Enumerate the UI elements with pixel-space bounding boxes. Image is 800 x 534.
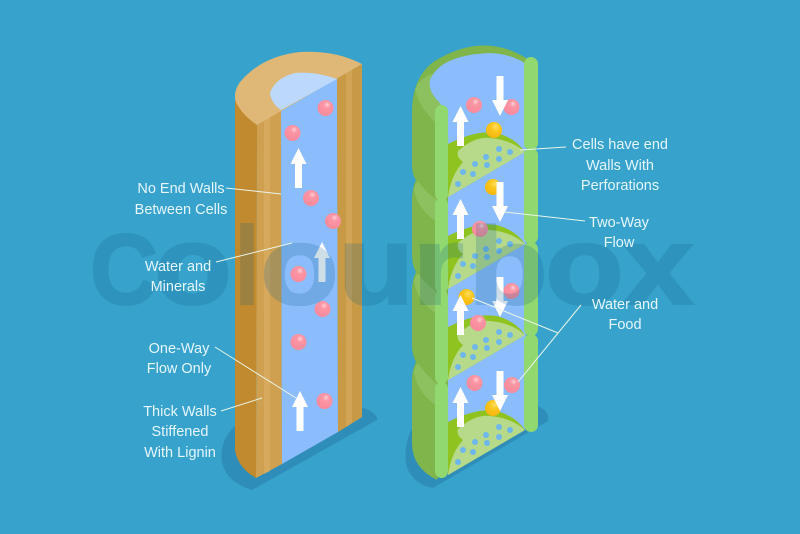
watermark: o xyxy=(545,203,624,328)
xylem top cap xyxy=(235,52,362,125)
label: one-way flow: One-Way xyxy=(149,341,209,357)
watermark xyxy=(90,203,694,328)
watermark: o xyxy=(260,203,339,328)
watermark: b xyxy=(468,205,548,328)
watermark: l xyxy=(235,205,259,328)
watermark: o xyxy=(154,203,232,328)
xylem water channel xyxy=(281,78,338,464)
leader lines xyxy=(215,147,585,411)
shadow: phloem xyxy=(406,406,548,488)
watermark: u xyxy=(338,203,414,328)
phloem arrows xyxy=(452,76,508,427)
label: no end walls: No End Walls xyxy=(137,181,225,197)
phloem channel xyxy=(430,53,526,473)
label: no end walls: Between Cells xyxy=(135,202,227,218)
label: water and minerals: Water and xyxy=(145,259,211,275)
phloem rim highlight xyxy=(415,73,445,122)
label: two-way flow: Flow xyxy=(604,235,635,251)
xylem left side wall xyxy=(235,100,257,478)
phloem right wall strips xyxy=(524,57,538,432)
watermark: x xyxy=(622,203,694,328)
xylem arrows xyxy=(290,148,330,431)
shadow: xylem xyxy=(222,408,377,490)
label: thick walls: Thick Walls xyxy=(143,404,217,420)
watermark: r xyxy=(412,203,464,328)
panel: xylem column xyxy=(222,52,377,490)
xylem top opening xyxy=(270,73,337,110)
label: water and food: Water and xyxy=(592,297,658,313)
sieve plates xyxy=(448,132,525,475)
label: one-way flow: Flow Only xyxy=(147,361,212,377)
label: water and minerals: Minerals xyxy=(151,279,205,295)
label: end walls perforations: Perforations xyxy=(581,178,659,194)
label: end walls perforations: Walls With xyxy=(586,158,654,174)
xylem right wall xyxy=(337,64,362,432)
watermark: C xyxy=(90,214,158,326)
phloem left bulges xyxy=(414,181,437,406)
xylem front wall xyxy=(256,110,282,478)
label: end walls perforations: Cells have end xyxy=(572,137,668,153)
label: water and food: Food xyxy=(608,317,642,333)
label: thick walls: With Lignin xyxy=(144,445,216,461)
phloem outer wall xyxy=(412,46,530,480)
phloem particles xyxy=(458,97,520,416)
phloem left wall strips xyxy=(435,105,448,478)
panel: phloem column xyxy=(406,46,548,488)
label: two-way flow: Two-Way xyxy=(589,215,649,231)
xylem particles xyxy=(284,100,341,409)
label: thick walls: Stiffened xyxy=(152,424,208,440)
